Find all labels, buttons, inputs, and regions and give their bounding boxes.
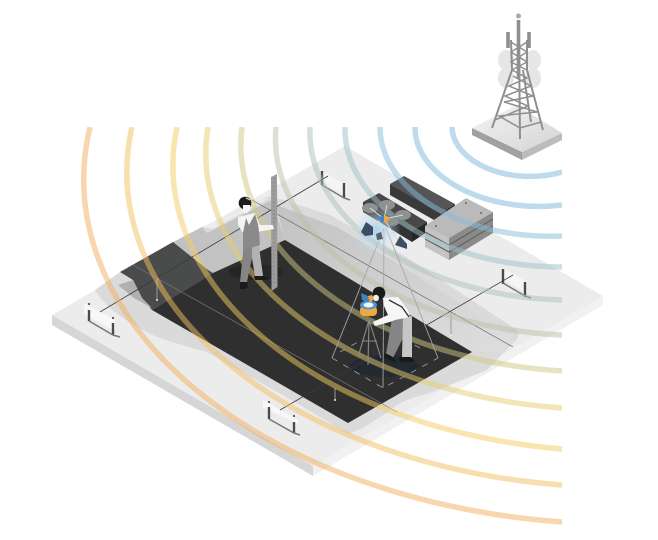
back lip <box>202 198 270 229</box>
worker shoes <box>240 276 269 289</box>
ground layout around surveyor <box>332 340 438 388</box>
surveyor shirt <box>373 297 410 326</box>
left wall <box>173 200 285 277</box>
signal wave arcs <box>84 127 562 522</box>
right wall <box>276 205 517 352</box>
tower lattice <box>492 40 543 139</box>
surveyor head <box>373 287 385 299</box>
scanner rotors <box>362 200 411 226</box>
tower antennas and mast <box>508 20 529 78</box>
hurdle: right <box>503 268 531 298</box>
survey strings and plumb bobs <box>100 176 513 412</box>
equipment: grey plate stack <box>425 198 493 260</box>
hurdle: left <box>84 303 120 337</box>
surveyor with theodolite <box>358 287 414 365</box>
device tripod legs <box>332 228 438 388</box>
tower dishes <box>498 50 541 88</box>
excavation pit <box>95 196 518 434</box>
tower base <box>472 128 522 160</box>
pit outer rim <box>95 196 518 434</box>
worker head <box>239 197 251 209</box>
worker overalls <box>243 214 260 250</box>
concrete slab <box>52 146 603 476</box>
staff <box>271 174 278 291</box>
surveyor shoes <box>384 353 414 362</box>
site survey illustration <box>52 14 603 525</box>
ground shadows <box>351 355 419 377</box>
equipment: dark block back <box>390 176 455 224</box>
telecom tower <box>472 14 562 160</box>
equipment: dark block front <box>363 193 427 242</box>
hurdle: top <box>320 170 350 200</box>
surveyor trousers <box>386 316 412 358</box>
dark floor <box>152 240 472 423</box>
dark ramp <box>120 242 213 310</box>
theodolite body <box>360 306 377 316</box>
worker legs <box>240 223 263 282</box>
scanner body <box>379 216 389 222</box>
scanner device <box>351 200 411 255</box>
ramp shadow wedge <box>118 280 152 308</box>
worker with measuring staff <box>238 174 278 291</box>
theodolite tripod <box>358 320 381 365</box>
scanner glow <box>351 205 401 255</box>
scanner feet <box>361 222 373 236</box>
worker shirt <box>238 213 274 233</box>
hurdle: bottom <box>263 400 300 435</box>
